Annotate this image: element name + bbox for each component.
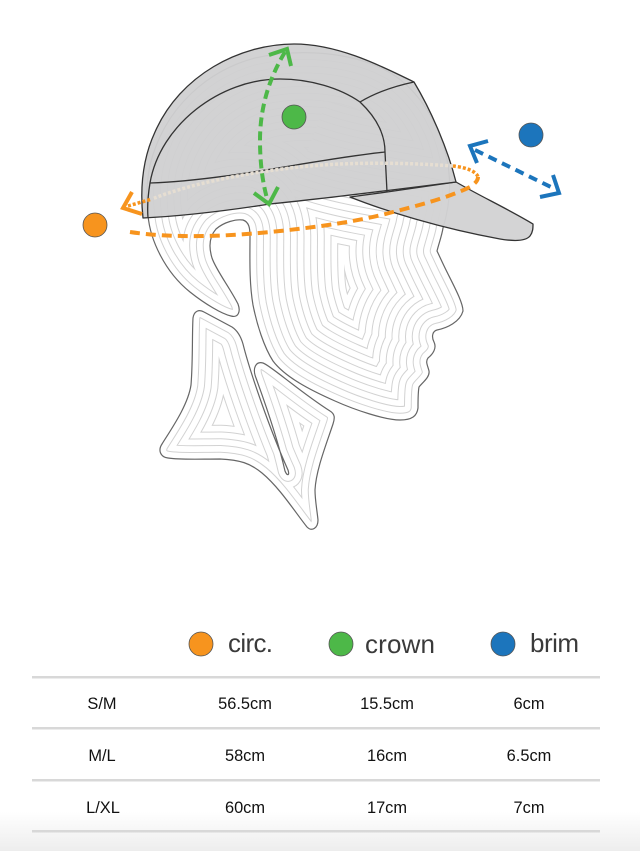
arrowhead bbox=[123, 192, 142, 214]
row M/L bbox=[88, 747, 551, 765]
row S/M: 6cm bbox=[514, 695, 544, 713]
row L/XL: 60cm bbox=[225, 799, 265, 817]
head contour illustration bbox=[154, 191, 457, 414]
row S/M bbox=[87, 695, 544, 713]
row M/L: M/L bbox=[88, 747, 116, 765]
cap brim bbox=[350, 182, 533, 241]
row L/XL: L/XL bbox=[86, 799, 120, 817]
dashed front line bbox=[130, 177, 478, 236]
row S/M: S/M bbox=[87, 695, 117, 713]
legend bbox=[189, 628, 579, 659]
marker: circumference bbox=[83, 213, 107, 237]
row M/L: 6.5cm bbox=[507, 747, 551, 765]
row S/M: 56.5cm bbox=[218, 695, 272, 713]
dotted ends bbox=[128, 166, 478, 206]
front panel seam bbox=[148, 79, 387, 218]
row S/M: 15.5cm bbox=[360, 695, 414, 713]
right arrowhead bbox=[540, 175, 559, 197]
legend dot: circ bbox=[189, 632, 213, 656]
brim arrow bbox=[470, 141, 559, 197]
legend label: brim: brim bbox=[530, 628, 579, 658]
dashed line bbox=[475, 150, 555, 189]
row M/L: 58cm bbox=[225, 747, 265, 765]
marker: crown bbox=[282, 105, 306, 129]
cap crown bbox=[142, 44, 456, 218]
dashed curve bbox=[260, 52, 285, 202]
legend label: crown: crown bbox=[365, 629, 435, 659]
crown arrow bbox=[254, 49, 291, 204]
circumference arrow bbox=[123, 166, 478, 236]
size table bbox=[32, 676, 600, 832]
legend label: circ: circ. bbox=[228, 628, 273, 658]
head outline bbox=[147, 53, 463, 420]
band seam bbox=[150, 152, 385, 183]
row L/XL: 17cm bbox=[367, 799, 407, 817]
row L/XL: 7cm bbox=[514, 799, 544, 817]
bottom arrowhead bbox=[254, 187, 278, 204]
legend dot: crown bbox=[329, 632, 353, 656]
side panel seam bbox=[360, 82, 414, 102]
legend dot: brim bbox=[491, 632, 515, 656]
neck outline bbox=[160, 311, 334, 529]
left arrowhead bbox=[470, 141, 488, 163]
cap bbox=[142, 44, 533, 241]
row L/XL bbox=[86, 799, 544, 817]
bottom background fade bbox=[0, 812, 640, 851]
marker: brim bbox=[519, 123, 543, 147]
neck contour illustration bbox=[166, 317, 328, 522]
circumference rear dotted line bbox=[152, 163, 453, 199]
row M/L: 16cm bbox=[367, 747, 407, 765]
top arrowhead bbox=[269, 49, 291, 66]
